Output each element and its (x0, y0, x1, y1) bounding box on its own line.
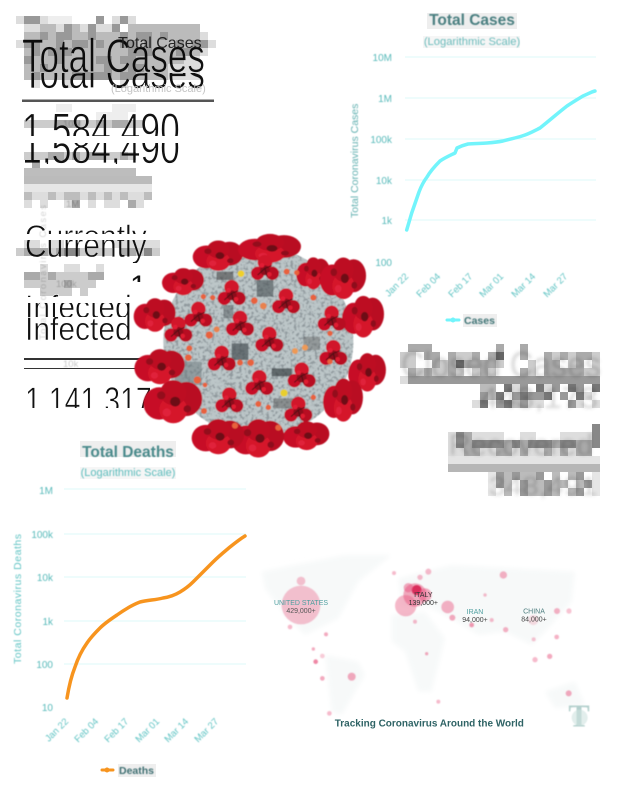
country labels: 429,000+ (286, 608, 316, 615)
x axis ticks: Mar 27 (192, 716, 221, 745)
y axis ticks (31, 486, 54, 714)
y axis ticks: 10 (42, 703, 53, 714)
mosaic: heading pixelation (16, 20, 216, 116)
x axis ticks (43, 716, 221, 745)
x axis ticks: Mar 14 (162, 716, 191, 745)
heading: Total Cases (left): Total Cases (118, 35, 202, 52)
y axis label: Total Coronavirus Deaths (12, 534, 24, 664)
x axis ticks: Mar 01 (477, 271, 506, 300)
text: Recovered: Recovered (449, 429, 593, 462)
country labels: IRAN (467, 609, 483, 616)
map caption: Tracking Coronavirus Around the World (335, 718, 524, 729)
y axis ticks: 100 (36, 660, 53, 671)
chart title: Total Cases (429, 12, 515, 29)
panel: total deaths chart (12, 441, 246, 777)
panel: left ghost chart labels: 1M (66, 199, 79, 210)
legend: Cases (464, 315, 495, 327)
legend (102, 764, 156, 777)
country labels: UNITED STATES (274, 600, 328, 607)
panel: left ghost chart labels: 10M (63, 119, 82, 130)
x axis ticks: Feb 17 (102, 716, 131, 745)
logo: newspaper T: T (568, 698, 590, 734)
mosaic tiles (400, 348, 600, 492)
heading: Total Cases (left): Total Cases (22, 45, 205, 98)
x axis ticks: Mar 27 (541, 271, 570, 300)
text: Recovered: 348,491 (489, 471, 597, 501)
heading: Total Cases (left): (Logarithmic Scale) (111, 83, 206, 95)
chart title (80, 441, 176, 479)
y axis ticks (370, 53, 393, 269)
cases curve (407, 91, 595, 230)
y axis ticks: 1k (381, 216, 393, 227)
x axis ticks (383, 271, 570, 300)
text: Recovered (449, 429, 597, 501)
x axis ticks: Feb 04 (414, 271, 443, 300)
legend (447, 314, 497, 327)
inner spike proteins (164, 255, 347, 422)
outbreak bubbles (282, 569, 572, 716)
x axis ticks: Jan 22 (43, 716, 71, 744)
grid lines (405, 57, 596, 220)
x axis ticks: Feb 17 (446, 271, 475, 300)
virus illustration (134, 234, 386, 458)
chart title (423, 12, 520, 48)
chart title: (Logarithmic Scale) (424, 36, 520, 48)
panel: left ghost chart labels: Total Coronavirus Cases (38, 205, 49, 340)
y axis ticks: 100k (370, 135, 393, 146)
y axis ticks: 10M (373, 53, 392, 64)
heading: Currently: Currently (25, 220, 147, 253)
legend: Deaths (119, 765, 154, 777)
stat: total cases number: 1,584,490 (22, 104, 180, 155)
panel: left ghost chart labels: 10k (63, 359, 79, 370)
x axis ticks: Mar 14 (509, 271, 538, 300)
x axis ticks: Jan 22 (383, 271, 411, 299)
country labels: ITALY (414, 592, 433, 599)
heading: Total Cases (left): Total Cases (22, 29, 205, 82)
map land masses (262, 555, 585, 715)
y axis ticks: 10k (376, 176, 393, 187)
country labels: CHINA (523, 608, 545, 615)
x axis ticks: Mar 01 (133, 716, 162, 745)
stat: total cases number (25, 114, 178, 164)
text: Closed Cases (401, 344, 601, 415)
divider line (22, 100, 214, 102)
heading: Infected: Infected (25, 289, 132, 325)
stat: currently infected number: 1,141,317 (25, 380, 152, 422)
mosaic: number pixelation (24, 124, 152, 204)
country labels: 139,000+ (409, 600, 438, 607)
y axis ticks: 10k (37, 573, 54, 584)
panel: left ghost chart labels: 100k (56, 279, 77, 290)
divider lines (24, 358, 152, 369)
x axis ticks: Feb 04 (72, 716, 101, 745)
y axis ticks: 1k (42, 617, 54, 628)
heading: Currently: Currently (25, 226, 147, 264)
chart title: (Logarithmic Scale) (81, 467, 175, 479)
virus body (163, 247, 353, 437)
heading: Infected (28, 294, 130, 340)
panel: total cases chart (349, 12, 596, 327)
panel: world map (262, 555, 590, 734)
text: Closed Cases: 443,173 (480, 382, 598, 415)
mosaic: Currently pixelation (16, 244, 160, 292)
y axis label: Total Coronavirus Cases (349, 104, 361, 218)
mosaic: Closed Cases and Recovered (400, 344, 601, 501)
y axis ticks: 100k (31, 530, 54, 541)
country labels: 84,000+ (521, 616, 547, 623)
text: Closed Cases: Closed Cases (401, 344, 601, 385)
y axis ticks: 100 (375, 258, 392, 269)
country labels: 94,000+ (462, 617, 488, 624)
y axis ticks: 1M (378, 94, 392, 105)
outer spike proteins (134, 234, 386, 458)
y axis ticks: 1M (39, 486, 53, 497)
stat: small figure fragment: 1 (130, 270, 147, 303)
stat: total cases number: 1,584,490 (22, 122, 180, 173)
deaths curve (67, 536, 245, 698)
country labels (274, 592, 547, 624)
orange and yellow dots (185, 269, 333, 431)
grid lines (64, 489, 246, 664)
heading: Infected: Infected (25, 311, 132, 347)
chart title: Total Deaths (82, 444, 174, 461)
panel: left ghost chart labels (38, 119, 82, 370)
